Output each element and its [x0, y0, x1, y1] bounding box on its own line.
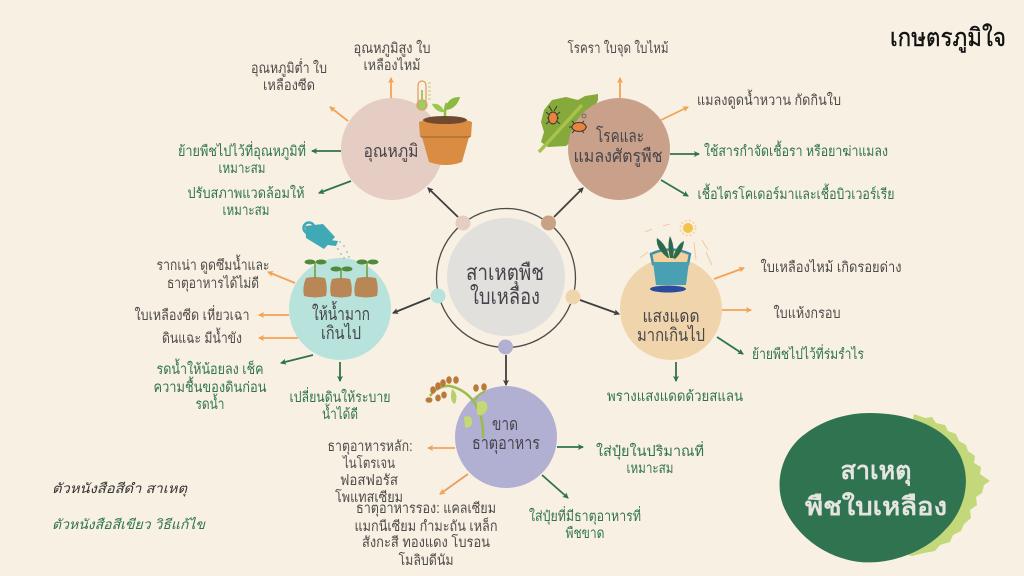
- text: change soil: น้ำได้ดี: [322, 403, 358, 423]
- text: move to shade: ย้ายพืชไปไว้ที่ร่มรำไร: [752, 344, 864, 363]
- text: micronutrients: [354, 500, 498, 569]
- panel: disease and pests: แมลงศัตรูพืช: [574, 146, 662, 167]
- text: macronutrients: ไนโตรเจน: [342, 454, 395, 472]
- legend: ตัวหนังสือสีเขียว วิธีแก้ไข: [52, 516, 206, 532]
- legend: ตัวหนังสือสีดำ สาเหตุ: [52, 481, 188, 497]
- icon: sun and potted plant: [640, 220, 712, 292]
- icon: leaf: [541, 94, 598, 147]
- badge: title blob: สาเหตุ: [840, 457, 912, 487]
- text: move plant: ย้ายพืชไปไว้ที่อุณหภูมิที่: [178, 141, 306, 160]
- badge: title blob: [780, 413, 990, 562]
- text: water less: [154, 358, 267, 413]
- text: fertilizer type: พืชขาด: [566, 525, 604, 542]
- central hub: [430, 208, 580, 354]
- text: water less: รดน้ำ: [196, 393, 224, 413]
- text: fungal disease: โรครา ใบจุด ใบไหม้: [568, 39, 668, 57]
- text: move plant: เหมาะสม: [218, 161, 266, 177]
- text: high temperature: เหลืองไหม้: [364, 56, 420, 74]
- central hub: ใบเหลือง: [470, 284, 540, 309]
- panel: temperature: อุณหภูมิ: [364, 141, 418, 162]
- text: fertilizer type: [529, 506, 641, 542]
- brand title: เกษตรภูมิใจ: [890, 23, 1006, 53]
- panel: too much sunlight: แสงแดด: [642, 306, 700, 326]
- text: change soil: เปลี่ยนดินให้ระบาย: [290, 387, 390, 406]
- panel: nutrient deficiency: [328, 376, 704, 569]
- text: high temperature: อุณหภูมิสูง ใบ: [354, 39, 430, 57]
- text: change soil: [290, 387, 390, 423]
- text: dry leaf: ใบแห้งกรอบ: [774, 304, 840, 322]
- panel: overwatering: [134, 222, 391, 423]
- panel: disease and pests: โรคและ: [596, 125, 644, 146]
- text: micronutrients: โมลิบดีนัม: [398, 551, 454, 569]
- text: root rot: [156, 254, 270, 292]
- icon: thermometer and potted seedling: [417, 81, 472, 165]
- text: leaf burn: ใบเหลืองไหม้ เกิดรอยด่าง: [760, 258, 902, 276]
- text: macronutrients: [328, 439, 412, 506]
- text: fertilizer amount: ใส่ปุ๋ยในปริมาณที่: [596, 441, 704, 460]
- panel: temperature: [178, 39, 472, 219]
- text: macronutrients: ฟอสฟอรัส: [340, 473, 398, 489]
- arrows: sunlight: [676, 268, 751, 381]
- icon: branch with pods: [426, 376, 487, 438]
- text: fertilizer type: ใส่ปุ๋ยที่มีธาตุอาหารที่: [529, 506, 641, 525]
- panel: nutrient deficiency: ขาด: [492, 414, 518, 434]
- panel: overwatering: เกินไป: [321, 322, 361, 343]
- text: sucking insects: แมลงดูดน้ำหวาน กัดกินใบ: [697, 89, 841, 109]
- arrows: nutrient: [428, 447, 583, 498]
- text: biocontrol: เชื้อไตรโคเดอร์มาและเชื้อบิวเวอร์เรีย: [698, 183, 894, 203]
- text: fungicide: ใช้สารกำจัดเชื้อรา หรือยาฆ่าแมลง: [704, 140, 888, 160]
- panel: too much sunlight: [607, 220, 902, 405]
- text: adjust environment: ปรับสภาพแวดล้อมให้: [188, 184, 304, 202]
- text: water less: รดน้ำให้น้อยลง เช็ค: [156, 358, 264, 378]
- panel: disease and pests: [539, 39, 894, 203]
- panel: overwatering: ให้น้ำมาก: [312, 301, 370, 324]
- text: micronutrients: ธาตุอาหารรอง: แคลเซียม: [356, 500, 496, 517]
- text: wilting: ใบเหลืองซีด เหี่ยวเฉา: [134, 305, 250, 324]
- text: fertilizer amount: [596, 441, 704, 477]
- icon: watering can: [304, 222, 350, 259]
- icon: three seedlings in sacks: [303, 260, 378, 298]
- text: root rot: รากเน่า ดูดซึมน้ำและ: [156, 254, 270, 274]
- arrows: disease: [620, 78, 699, 196]
- text: micronutrients: แมกนีเซียม กำมะถัน เหล็ก: [354, 516, 498, 535]
- text: adjust environment: เหมาะสม: [222, 203, 270, 219]
- text: micronutrients: สังกะสี ทองแดง โบรอน: [362, 533, 490, 551]
- text: low temperature: อุณหภูมิต่ำ ใบ: [251, 58, 327, 77]
- text: adjust environment: [188, 184, 304, 219]
- text: macronutrients: โพแทสเซียม: [335, 488, 403, 506]
- text: water less: ความชื้นของดินก่อน: [154, 376, 267, 396]
- text: waterlogged: ดินแฉะ มีน้ำขัง: [162, 327, 242, 347]
- legend: [52, 481, 206, 532]
- text: low temperature: [251, 58, 327, 94]
- central hub: สาเหตุพืช: [466, 260, 544, 286]
- connector arrows from hub to causes: [393, 188, 619, 385]
- text: high temperature: [354, 39, 430, 74]
- text: fertilizer amount: เหมาะสม: [626, 461, 674, 477]
- panel: nutrient deficiency: ธาตุอาหาร: [472, 433, 540, 454]
- text: low temperature: เหลืองซีด: [263, 77, 315, 94]
- arrows: temperature: [312, 78, 391, 193]
- panel: too much sunlight: มากเกินไป: [637, 324, 705, 345]
- arrows: overwatering: [259, 272, 340, 381]
- text: macronutrients: ธาตุอาหารหลัก:: [328, 439, 412, 455]
- text: shade net: พรางแสงแดดด้วยสแลน: [607, 388, 743, 405]
- text: move plant: [178, 141, 306, 177]
- icon: leaf vein and insects: [539, 105, 587, 152]
- text: root rot: ธาตุอาหารได้ไม่ดี: [167, 274, 259, 292]
- badge: title blob: พืชใบเหลือง: [805, 491, 947, 521]
